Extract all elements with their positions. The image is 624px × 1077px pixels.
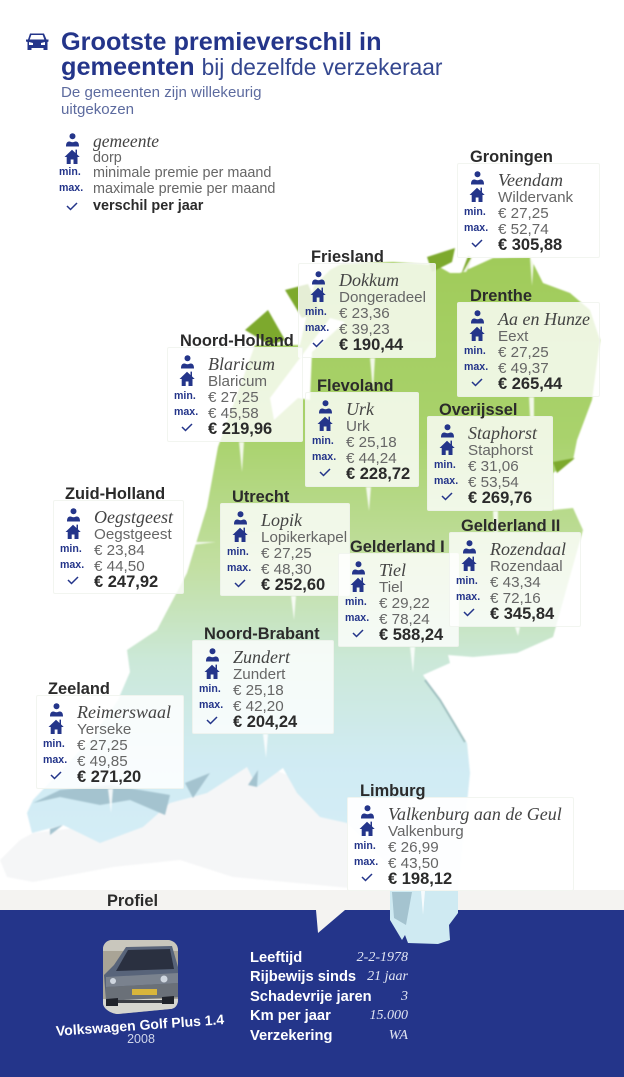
difference row: € 247,92 [94, 573, 158, 591]
speech bubble notch and Limburg tip [316, 891, 458, 944]
row: Schadevrije: Schadevrije jaren [250, 989, 372, 1005]
min row: min. [227, 546, 249, 558]
dorp row [36, 722, 184, 738]
max row [464, 221, 549, 238]
gemeente row: Aa en Hunze [498, 309, 590, 329]
car year: 2008 [127, 1032, 155, 1046]
max row: max. [60, 559, 84, 571]
heading: Utrecht [232, 488, 289, 506]
panel background [457, 302, 600, 397]
row: Leeftijd [250, 949, 408, 967]
max row: € 49,85 [77, 753, 128, 770]
dorp row: Oegstgeest [94, 526, 172, 543]
legend: gemeente: gemeente [93, 131, 159, 151]
car photo [103, 940, 178, 1014]
gemeente row: Reimerswaal [77, 702, 171, 722]
band above profile [0, 890, 624, 910]
min row: min. [199, 683, 221, 695]
min row: min. [60, 543, 82, 555]
dorp row: Lopikerkapel [261, 529, 347, 546]
panel: Groningen [457, 148, 600, 258]
min row: min. [464, 206, 486, 218]
max row: € 48,30 [261, 561, 312, 578]
max row [305, 321, 390, 338]
max row [220, 562, 350, 578]
subtitle: uitgekozen [61, 101, 134, 118]
max row [464, 360, 549, 377]
difference row: € 305,88 [498, 236, 562, 254]
min row: € 31,06 [468, 458, 519, 475]
dorp row: Wildervank [498, 189, 573, 206]
gemeente row [347, 806, 574, 822]
min row: € 43,34 [490, 574, 541, 591]
difference row: € 345,84 [490, 605, 554, 623]
heading: Limburg [360, 782, 426, 800]
gemeente row [312, 270, 399, 290]
dorp row: Rozendaal [490, 558, 563, 575]
max row [53, 559, 184, 575]
gemeente row: Urk [346, 399, 374, 419]
heading: Gelderland I [350, 538, 445, 556]
max row [36, 754, 184, 770]
dorp row [338, 580, 459, 596]
heading: Profiel: Profiel [107, 892, 158, 910]
dorp row: Valkenburg [388, 823, 464, 840]
difference row [427, 490, 553, 506]
max row: max. [434, 475, 458, 487]
row: Rijbewijs: 21 jaar [367, 969, 408, 984]
dorp row [470, 326, 528, 345]
max row: max. [456, 591, 480, 603]
min row: € 27,25 [208, 389, 259, 406]
min row: min. [456, 575, 478, 587]
min row: min. [354, 840, 376, 852]
min row [192, 683, 334, 699]
panel background [192, 640, 334, 734]
max row: max. [227, 562, 251, 574]
panel: Zeeland [36, 695, 184, 789]
gemeente row [338, 562, 459, 578]
panel: Gelderland I [338, 553, 459, 647]
min row: € 29,22 [379, 595, 430, 612]
max row: max. [345, 612, 369, 624]
min row: € 23,84 [94, 542, 145, 559]
min row [312, 434, 397, 451]
profile background panel [0, 910, 624, 1077]
max row: max. [305, 322, 329, 334]
min row: € 25,18 [346, 434, 397, 451]
row: Km: Km per jaar [250, 1008, 331, 1024]
max row: max. [464, 222, 488, 234]
max row: max. [43, 754, 67, 766]
difference row: € 204,24 [233, 713, 297, 731]
icon: car [26, 34, 48, 50]
difference row [449, 606, 581, 622]
panel: Limburg [347, 797, 574, 891]
min row: € 26,99 [388, 839, 439, 856]
max row [192, 699, 334, 715]
difference row [347, 871, 574, 887]
max row: € 52,74 [498, 221, 549, 238]
row: Verzekering [250, 1027, 408, 1045]
heading: Noord-Holland [180, 332, 294, 350]
max row: € 44,50 [94, 558, 145, 575]
heading: Groningen [470, 148, 553, 166]
min row: min. [174, 390, 196, 402]
min row [338, 596, 459, 612]
gemeente row: Blaricum [208, 354, 275, 374]
min row [36, 738, 184, 754]
gemeente row [36, 704, 184, 720]
difference row [53, 574, 184, 590]
max row: € 42,20 [233, 698, 284, 715]
legend: dorp [64, 150, 122, 166]
car caption: Volkswagen Golf Plus 1.4 [55, 1011, 225, 1039]
max row [338, 612, 459, 628]
panel: Noord-Holland [167, 332, 303, 442]
min row [220, 546, 350, 562]
difference row [36, 769, 184, 785]
min row: min. [312, 435, 334, 447]
row: Rijbewijs: Rijbewijs sinds [250, 969, 356, 985]
min row: € 27,25 [261, 545, 312, 562]
dorp row: Urk [346, 418, 370, 435]
max row: € 43,50 [388, 855, 439, 872]
gemeente row: Dokkum [339, 270, 399, 290]
dorp row [220, 530, 350, 546]
row: Verzekering: Verzekering [250, 1028, 332, 1044]
difference row: € 588,24 [379, 626, 443, 644]
heading: Zuid-Holland [65, 485, 165, 503]
dorp row [427, 443, 553, 459]
min row: € 25,18 [233, 682, 284, 699]
dorp row: Yerseke [77, 721, 131, 738]
heading: Flevoland [317, 377, 394, 395]
max row: max. [464, 361, 488, 373]
difference row: € 219,96 [208, 420, 272, 438]
min row [427, 459, 553, 475]
difference row [338, 627, 459, 643]
panel background [305, 392, 419, 487]
subtitle: De gemeenten zijn willekeurig [61, 84, 262, 101]
gemeente row: Rozendaal [490, 539, 566, 559]
dorp row: Blaricum [208, 373, 267, 390]
panel: Drenthe [457, 287, 600, 397]
difference row: € 271,20 [77, 768, 141, 786]
legend: dorp: dorp [93, 150, 122, 166]
panel background [36, 695, 184, 789]
dorp row [318, 416, 370, 435]
panel background [457, 163, 600, 258]
panel: Flevoland [305, 377, 419, 487]
max row [427, 475, 553, 491]
legend: verschil: verschil per jaar [93, 198, 203, 214]
max row [312, 450, 397, 467]
min row: € 27,25 [498, 344, 549, 361]
gemeente row [192, 649, 334, 665]
min row [347, 840, 574, 856]
difference row: € 198,12 [388, 870, 452, 888]
row: Schadevrije [250, 988, 408, 1006]
gemeente row [53, 509, 184, 525]
min row [174, 389, 259, 406]
gemeente row [220, 512, 350, 528]
max row [449, 591, 581, 607]
max row: max. [312, 451, 336, 463]
dorp row: Zundert [233, 666, 285, 683]
max row: € 49,37 [498, 360, 549, 377]
max row: € 44,24 [346, 450, 397, 467]
max row [347, 856, 574, 872]
title: gemeenten bij dezelfde verzekeraar [61, 53, 442, 81]
dorp row: Tiel [379, 579, 403, 596]
panel background [53, 500, 184, 594]
min row [464, 205, 549, 222]
panel: Friesland [298, 248, 436, 358]
dorp row [180, 372, 267, 390]
row: Leeftijd: 2-2-1978 [357, 950, 408, 965]
gemeente row [449, 541, 581, 557]
panel: Gelderland II [449, 532, 581, 627]
min row [53, 543, 184, 559]
min row: min. [464, 345, 486, 357]
min row [449, 575, 581, 591]
dorp row [470, 188, 573, 206]
min row: min. [43, 738, 65, 750]
min row [464, 344, 549, 361]
gemeente row: Zundert [233, 647, 290, 667]
dorp row [192, 667, 334, 683]
min row [305, 305, 390, 322]
gemeente row: Valkenburg aan de Geul [388, 804, 562, 824]
min row: € 27,25 [498, 205, 549, 222]
heading: Gelderland II [461, 517, 560, 535]
row: Verzekering: WA [389, 1028, 408, 1043]
row: Km [250, 1007, 408, 1025]
max row: € 78,24 [379, 611, 430, 628]
legend: max: maximale premie per maand [93, 181, 275, 197]
panel background [298, 263, 436, 358]
min row: € 27,25 [77, 737, 128, 754]
gemeente row: Oegstgeest [94, 507, 173, 527]
panel: Noord-Brabant [192, 640, 334, 734]
panel: Zuid-Holland [53, 500, 184, 594]
dorp row [449, 559, 581, 575]
difference row [192, 714, 334, 730]
gemeente row: Veendam [498, 170, 563, 190]
gemeente row: Staphorst [468, 423, 537, 443]
min row: min. [305, 306, 327, 318]
difference row: € 265,44 [498, 375, 562, 393]
difference row: € 269,76 [468, 489, 532, 507]
min row: min. [345, 596, 367, 608]
min row: min. [434, 459, 456, 471]
dorp row: Staphorst [468, 442, 533, 459]
max row: € 53,54 [468, 474, 519, 491]
gemeente row: Lopik [261, 510, 302, 530]
legend [59, 131, 275, 214]
subtitle [61, 84, 262, 118]
max row: max. [354, 856, 378, 868]
difference row: € 228,72 [346, 465, 410, 483]
gemeente row [319, 399, 374, 419]
max row: € 72,16 [490, 590, 541, 607]
dorp row [310, 288, 426, 306]
panel: Overijssel [427, 416, 553, 511]
row: Schadevrije: 3 [401, 989, 408, 1004]
panel background [427, 416, 553, 511]
heading: Zeeland [48, 680, 110, 698]
row: Rijbewijs [250, 968, 408, 986]
panel background [338, 553, 459, 647]
gemeente row: Tiel [379, 560, 406, 580]
max row: max. [199, 699, 223, 711]
gemeente row [427, 425, 553, 441]
profile table [250, 949, 408, 1045]
max row: max. [174, 406, 198, 418]
title [61, 28, 442, 81]
min row: € 23,36 [339, 305, 390, 322]
max row: € 45,58 [208, 405, 259, 422]
panel background [167, 347, 303, 442]
heading: Noord-Brabant [204, 625, 320, 643]
difference row [220, 577, 350, 593]
dorp row [347, 824, 574, 840]
row: Leeftijd: Leeftijd [250, 950, 302, 966]
max row: € 39,23 [339, 321, 390, 338]
dorp row: Eext [498, 328, 528, 345]
panel background [347, 797, 574, 891]
legend: min: minimale premie per maand [93, 165, 271, 181]
row: Km: 15.000 [370, 1008, 408, 1023]
heading: Overijssel [439, 401, 517, 419]
max row [174, 405, 259, 422]
difference row: € 190,44 [339, 336, 403, 354]
difference row: € 252,60 [261, 576, 325, 594]
panel: Utrecht [220, 503, 350, 596]
heading: Friesland [311, 248, 384, 266]
legend: min: min. [59, 166, 81, 178]
legend: max: max. [59, 182, 83, 194]
heading: Drenthe [470, 287, 532, 305]
panel background [220, 503, 350, 596]
panel background [449, 532, 581, 627]
dorp row: Dongeradeel [339, 289, 426, 306]
title: Grootste premieverschil in [61, 28, 382, 56]
dorp row [53, 527, 184, 543]
